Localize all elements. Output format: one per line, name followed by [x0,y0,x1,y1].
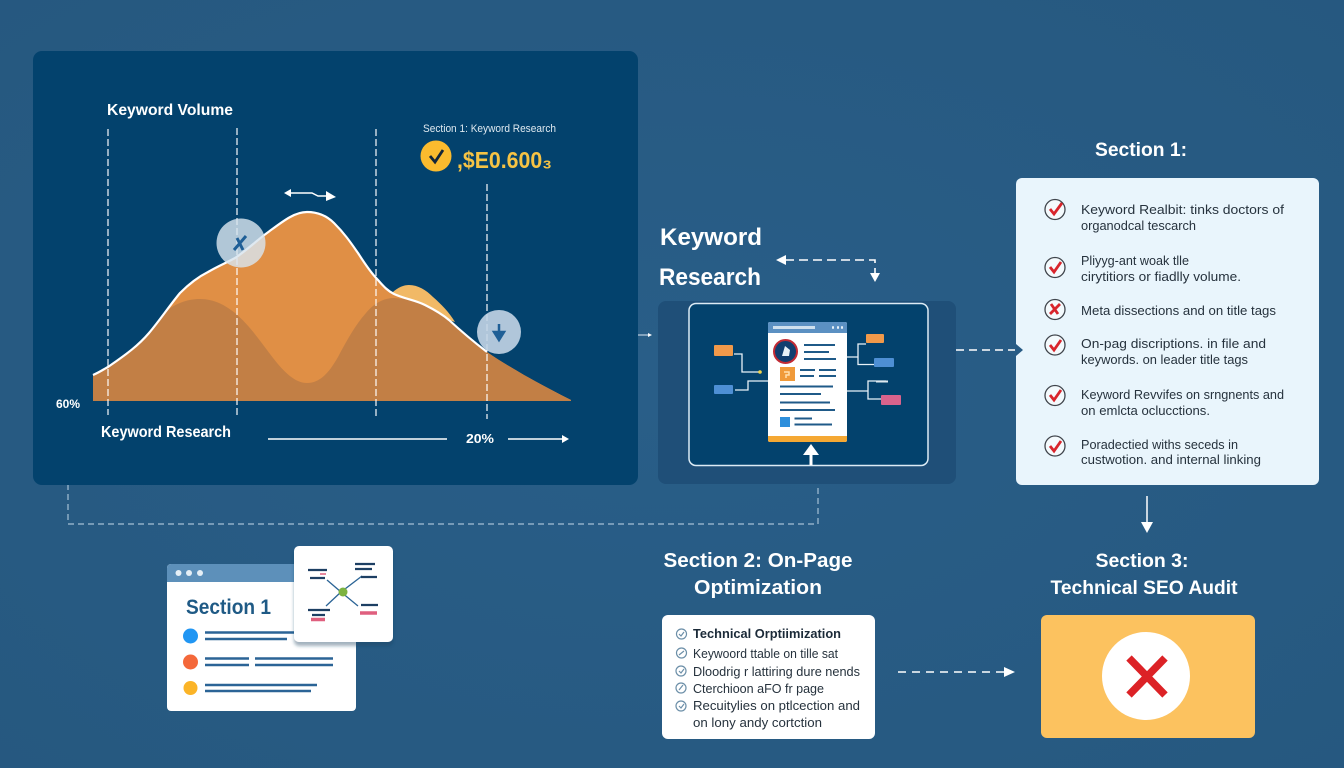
checklist text: Technical Orptiimization [693,627,841,641]
illustration: section 1 browser window [167,564,356,711]
marker: upper data point [216,218,266,268]
arrow: dashed to section 3 [898,667,1015,677]
callout: section 1 value [420,123,556,173]
axis label: 20%: 20% [466,432,494,446]
callout: section 1 value: ,$E0.600₃ [457,147,552,173]
heading: keyword research: Research [659,264,761,291]
checklist text: keywords. on leader title tags [1081,352,1248,367]
heading: section 2: Optimization [694,577,822,599]
axis label: 60%: 60% [56,399,80,411]
heading: section 3: Section 3: [1096,551,1188,572]
panel: technical audit warning [1041,615,1255,738]
checklist text: Keyword Revvifes on srngnents and [1081,387,1284,402]
checklist text: Recuitylies on ptlcection and [693,699,860,713]
checklist text [1081,202,1284,467]
panel: on-page checklist [662,615,875,739]
checklist text: On-pag discriptions. in file and [1081,336,1266,351]
heading: keyword research [659,224,762,291]
checklist text: on lony andy cortction [693,716,822,730]
arrow: up into document [803,444,819,465]
heading: section 2: Section 2: On-Page [664,550,852,572]
panel: keyword volume chart [33,51,638,485]
heading: section 3: Technical SEO Audit [1050,578,1238,599]
illustration: mind map card [294,546,393,642]
checklist text: organodcal tescarch [1081,218,1196,233]
checklist text [693,627,860,730]
node tags and connectors [714,334,901,405]
arrow: double-headed peak [284,189,336,201]
check icons [1045,200,1065,456]
axis label: keyword research: Keyword Research [101,424,231,441]
arrow: axis [508,435,569,443]
list rows [183,628,333,695]
heading: section 3 [1050,551,1238,599]
panel: section 1 checklist [1016,178,1319,485]
checklist text: Dloodrig r lattiring dure nends [693,665,860,679]
checklist text: Meta dissections and on title tags [1081,303,1276,318]
heading: section 2 [664,550,852,599]
checklist text: Cterchioon aFO fr page [693,682,824,696]
check icons [676,629,686,711]
arrow: chart to keyword panel [638,333,652,337]
marker: lower data point [477,310,521,354]
callout: section 1 value: Section 1: Keyword Research [423,123,556,135]
checklist text: Keyword Realbit: tinks doctors of [1081,202,1284,217]
checklist text: Poradectied withs seceds in [1081,437,1238,452]
heading: keyword research: Keyword [660,224,762,251]
area chart [93,212,571,401]
guide lines [108,128,487,419]
checklist text: Pliyyg-ant woak tlle [1081,253,1189,268]
checklist text: custwotion. and internal linking [1081,452,1261,467]
axis line [268,438,447,440]
window heading: Section 1 [186,596,271,619]
checklist text: Keywoord ttable on tille sat [693,647,839,661]
checklist text: cirytitiors or fiadlly volume. [1081,269,1241,284]
heading: section 1: Section 1: [1095,140,1187,161]
connector: dashed link below chart panel [68,484,818,524]
heading: keyword volume: Keyword Volume [107,102,233,119]
arrow: dashed bidirectional [776,255,880,282]
arrow: dashed to checklist [956,344,1023,356]
icon: red cross [1102,632,1190,720]
checklist text: on emlcta oclucctions. [1081,403,1210,418]
panel: keyword research diagram [658,301,956,484]
arrow: checklist down to section 3 [1141,496,1153,533]
document card [768,322,847,442]
